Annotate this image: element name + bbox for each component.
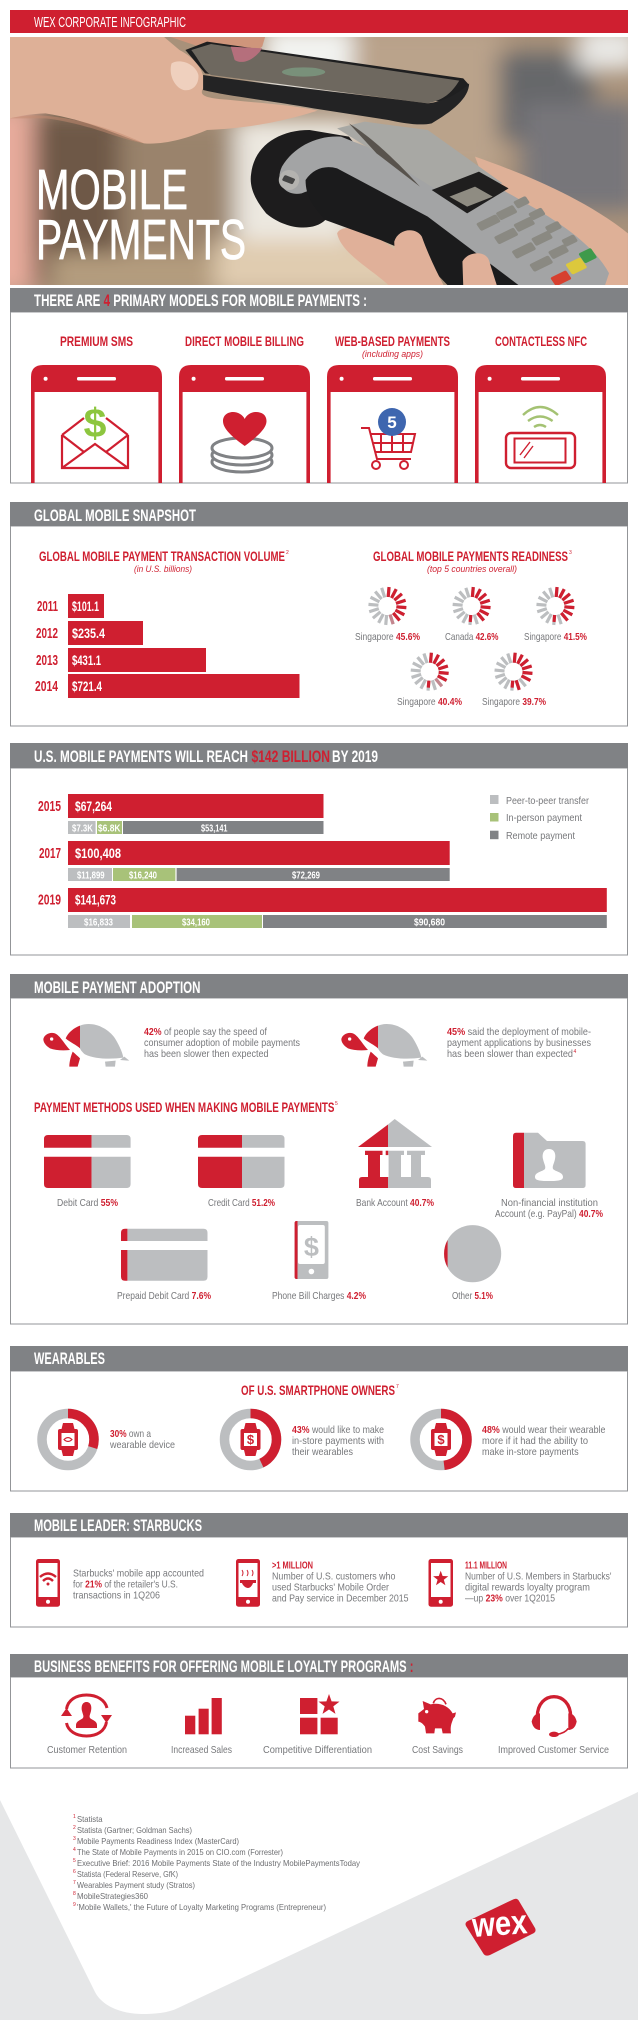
icon: phone with shopping cart: [327, 365, 458, 483]
legend: [490, 795, 589, 842]
icon: competitive differentiation: [300, 1694, 340, 1734]
footnotes: Wearables Payment study (Stratos): [77, 1881, 195, 1890]
text: 1 million customers: >1 MILLION: [272, 1560, 313, 1572]
title: mobile payments: PAYMENTS: [36, 208, 246, 272]
label: improved customer service: Improved Customer Service: [498, 1744, 609, 1756]
heading: U.S. mobile payments: BY 2019: [332, 747, 378, 766]
donut: 48%: [415, 1414, 467, 1466]
text: 11.1 million members: [465, 1560, 612, 1604]
chart title: readiness: (top 5 countries overall): [427, 564, 517, 574]
icon: cost savings piggy bank: [418, 1698, 456, 1733]
footnotes: Statista: [77, 1815, 103, 1824]
chart title: transaction volume: [39, 548, 289, 574]
footer background shape: [0, 1792, 638, 2020]
label: cost savings: Cost Savings: [412, 1744, 463, 1756]
label: web-based payments: [335, 333, 450, 359]
bar group: 2019: $90,680: [414, 916, 445, 928]
icon: phone with heart and coins: [179, 365, 310, 483]
subheading: smartphone owners: OF U.S. SMARTPHONE OWNERS: [241, 1382, 395, 1398]
bar chart: transaction volume: 2014: [35, 678, 58, 695]
footnotes: 4: [73, 1847, 76, 1853]
icon: prepaid debit card 7.6%: [121, 1229, 208, 1281]
donut: 48%: $: [437, 1432, 445, 1447]
logo: wex: wex: [470, 1903, 529, 1945]
footnotes: 'Mobile Wallets,' the Future of Loyalty Marketing Programs (Entrepreneur): [77, 1903, 326, 1912]
icon: customer retention: [61, 1695, 112, 1736]
donut: 30%: [42, 1414, 94, 1466]
text: 43% in-store: their wearables: [292, 1446, 353, 1458]
panel: primary models: [10, 288, 628, 483]
gauge: Singapore 45.6%: Singapore 45.6%: [355, 631, 421, 643]
bar group: 2015: $6.8K: [98, 822, 121, 834]
text: 48% would wear: more if it had the ability to: [482, 1435, 588, 1447]
icon: phone with star: [428, 1559, 453, 1607]
text: 21% transactions: transactions in 1Q206: [73, 1590, 160, 1602]
text: 11.1 million members: digital rewards loyalty program: [465, 1582, 590, 1594]
logo: wex: [466, 1899, 536, 1956]
donut: 43%: $: [247, 1432, 255, 1447]
gauge: Canada 42.6%: [445, 585, 499, 643]
label: increased sales: Increased Sales: [171, 1744, 232, 1756]
heading: mobile payment adoption: MOBILE PAYMENT ADOPTION: [34, 978, 200, 997]
text: 30% own: wearable device: [109, 1439, 175, 1451]
footnotes: Statista (Gartner; Goldman Sachs): [77, 1826, 192, 1835]
text: 1 million customers: used Starbucks' Mobile Order: [272, 1582, 389, 1594]
icon: other pie 5.1%: [444, 1225, 501, 1282]
bar group: 2019: $141,673: [75, 892, 116, 908]
text: 45% slower deployment: has been slower than expected: [447, 1048, 573, 1060]
hand on phone: [10, 33, 317, 144]
footnotes: Executive Brief: 2016 Mobile Payments State of the Industry MobilePaymentsToday: [77, 1859, 361, 1868]
text: 1 million customers: and Pay service in December 2015: [272, 1592, 409, 1604]
top banner: [10, 10, 628, 33]
footnotes: 6: [73, 1869, 76, 1875]
gauge: Singapore 39.7%: Singapore 39.7%: [482, 696, 547, 708]
text: 45% slower deployment: payment applications by businesses: [447, 1037, 591, 1049]
bar chart: transaction volume: $431.1: [72, 652, 101, 668]
heading: business benefits: BUSINESS BENEFITS FOR OFFERING MOBILE LOYALTY PROGRAMS :: [34, 1657, 414, 1676]
right hand under terminal: [475, 157, 628, 287]
gauge: Singapore 40.4%: [397, 651, 463, 708]
panel: mobile payment adoption: [10, 974, 628, 1324]
label: other: Other 5.1%: [452, 1290, 494, 1302]
gauge: Singapore 39.7%: [482, 651, 547, 708]
chart title: readiness: [373, 548, 572, 574]
text: 45% slower deployment: 4: [574, 1049, 576, 1055]
text: 43% in-store: 43% would like to make: [292, 1424, 384, 1436]
icon: phone with contactless terminal: [475, 365, 606, 483]
title: mobile payments: MOBILE: [36, 158, 188, 222]
bar group: 2017: $72,269: [292, 870, 320, 882]
label: non-financial account: Non-financial institution: [501, 1197, 598, 1209]
bar chart: transaction volume: 2012: [36, 625, 58, 642]
bar group: 2017: 2017: [39, 845, 61, 862]
heading: primary models: THERE ARE 4 PRIMARY MODELS FOR MOBILE PAYMENTS :: [34, 291, 367, 310]
heading: wearables: WEARABLES: [34, 1349, 105, 1368]
text: 43% in-store: [292, 1424, 384, 1458]
title: mobile payments: [38, 169, 244, 260]
label: web-based payments: WEB-BASED PAYMENTS: [335, 333, 450, 349]
bar chart: transaction volume: $101.1: [72, 598, 99, 614]
text: 45% slower deployment: 45% said the deployment of mobile-: [447, 1026, 591, 1038]
icon: phone bill 4.2%: $: [304, 1232, 319, 1262]
heading: U.S. mobile payments: $142 BILLION: [252, 747, 330, 766]
bar group: 2015: 2015: [38, 798, 61, 815]
icon: folder account 40.7%: [513, 1133, 586, 1188]
label: credit card: Credit Card 51.2%: [208, 1197, 276, 1209]
text: 43% in-store: in-store payments with: [292, 1435, 384, 1447]
label: debit card: Debit Card 55%: [57, 1197, 119, 1209]
icon: debit card 55%: [44, 1135, 131, 1188]
panel: global mobile snapshot: [10, 502, 628, 726]
heading: payment methods: 5: [335, 1101, 338, 1107]
bar group: 2017: $11,899: [77, 870, 105, 882]
bar group: 2019: $16,833: [84, 916, 113, 928]
icon: phone with coffee cup: [236, 1559, 260, 1607]
text: 11.1 million members: —up 23% over 1Q2015: [465, 1592, 555, 1604]
text: 48% would wear: [482, 1424, 606, 1458]
footnotes: 5: [73, 1858, 76, 1864]
text: 11.1 million members: 11.1 MILLION: [465, 1560, 507, 1572]
legend: Peer-to-peer transfer: [506, 795, 589, 807]
keypad: [476, 196, 578, 272]
icon: credit card 51.2%: [198, 1135, 284, 1188]
fingers in front of terminal: [394, 230, 444, 285]
bar group: 2019: 2019: [38, 892, 61, 908]
label: web-based payments: (including apps): [362, 349, 423, 359]
terminal body: [250, 130, 353, 228]
label: bank account: Bank Account 40.7%: [356, 1197, 435, 1209]
icon: bank 40.7%: [358, 1119, 432, 1188]
bar chart: transaction volume: 2011: [37, 598, 58, 615]
heading: global mobile snapshot: GLOBAL MOBILE SNAPSHOT: [34, 506, 196, 525]
icon: turtle 45%: [341, 1024, 427, 1067]
label: contactless nfc: CONTACTLESS NFC: [495, 333, 587, 349]
bar group: 2017: $100,408: [75, 845, 121, 861]
text: 21% transactions: for 21% of the retailer's U.S.: [73, 1578, 178, 1590]
chart title: transaction volume: GLOBAL MOBILE PAYMENT TRANSACTION VOLUME: [39, 548, 285, 564]
text: 42% slower adoption: has been slower then expected: [144, 1048, 269, 1060]
text: 21% transactions: Starbucks' mobile app accounted: [73, 1568, 204, 1580]
label: customer retention: Customer Retention: [47, 1744, 127, 1756]
footnotes: 7: [73, 1880, 76, 1886]
bar chart: transaction volume: $721.4: [72, 678, 102, 694]
subheading: smartphone owners: 7: [396, 1384, 399, 1390]
legend: In-person payment: [506, 812, 582, 824]
text: 45% slower deployment: [447, 1026, 591, 1060]
label: direct mobile billing: DIRECT MOBILE BILLING: [185, 333, 304, 349]
footnotes: Mobile Payments Readiness Index (MasterCard): [77, 1837, 239, 1846]
text: 48% would wear: 48% would wear their wearable: [482, 1424, 606, 1436]
text: 42% slower adoption: [144, 1026, 300, 1060]
chart title: transaction volume: 2: [286, 550, 289, 556]
panel: U.S. mobile payments forecast: [10, 743, 628, 955]
panel: mobile leader starbucks: [10, 1513, 628, 1627]
footnotes: 1: [73, 1814, 76, 1820]
bar group: 2017: $16,240: [129, 870, 157, 882]
panel: wearables: [10, 1346, 628, 1491]
icon: phone with envelope: $: [84, 400, 107, 446]
bar chart: transaction volume: [35, 594, 300, 698]
bar group: 2015: [38, 794, 324, 834]
text: 48% would wear: make in-store payments: [482, 1446, 579, 1458]
phone: [185, 42, 469, 103]
label: non-financial account: Account (e.g. PayPal) 40.7%: [495, 1208, 604, 1220]
icon: turtle 42%: [43, 1024, 129, 1067]
footnotes: 8: [73, 1891, 76, 1897]
heading: payment methods: PAYMENT METHODS USED WHEN MAKING MOBILE PAYMENTS: [34, 1099, 334, 1115]
gauge: Singapore 41.5%: Singapore 41.5%: [524, 631, 588, 643]
bar chart: transaction volume: 2013: [36, 652, 58, 669]
icon: phone with wifi: [36, 1559, 60, 1607]
terminal hand fingers behind: [337, 228, 406, 285]
footnotes: Statista (Federal Reserve, GfK): [77, 1870, 178, 1879]
text: 30% own: 30% own a: [110, 1428, 151, 1440]
text: 30% own: [109, 1428, 175, 1451]
chart title: readiness: 3: [569, 550, 572, 556]
icon: increased sales: [185, 1698, 222, 1734]
icon: phone bill 4.2%: [295, 1221, 328, 1279]
gauge: Canada 42.6%: Canada 42.6%: [445, 631, 499, 643]
text: 42% slower adoption: consumer adoption of mobile payments: [144, 1037, 300, 1049]
gauge: Singapore 40.4%: Singapore 40.4%: [397, 696, 463, 708]
text: 1 million customers: Number of U.S. customers who: [272, 1570, 396, 1582]
icon: phone with shopping cart: 5: [387, 413, 397, 432]
heading: U.S. mobile payments: U.S. MOBILE PAYMENTS WILL REACH: [34, 747, 248, 766]
footnotes: The State of Mobile Payments in 2015 on CIO.com (Forrester): [77, 1848, 283, 1857]
chart title: transaction volume: (in U.S. billions): [134, 564, 192, 574]
text: 42% slower adoption: 42% of people say the speed of: [144, 1026, 267, 1038]
label: non-financial account: [495, 1197, 604, 1220]
text: 21% transactions: [73, 1568, 204, 1602]
hero photo: hand holding phone over payment terminal: [0, 27, 638, 293]
bar group: 2019: $34,160: [182, 916, 210, 928]
label: prepaid debit card: Prepaid Debit Card 7.6%: [117, 1290, 212, 1302]
footnotes: MobileStrategies360: [77, 1892, 148, 1901]
footnotes: [73, 1814, 361, 1912]
legend: Remote payment: [506, 830, 575, 842]
bar group: 2019: [38, 888, 607, 928]
bar group: 2015: $53,141: [201, 822, 228, 834]
icon: phone with envelope: [31, 365, 162, 483]
label: competitive differentiation: Competitive Differentiation: [263, 1744, 372, 1756]
bar chart: transaction volume: $235.4: [72, 625, 105, 641]
donut: 43%: [224, 1414, 276, 1466]
footnotes: 2: [73, 1825, 76, 1831]
top banner: WEX CORPORATE INFOGRAPHIC: [34, 14, 186, 31]
label: premium sms: PREMIUM SMS: [60, 333, 133, 349]
label: phone bill charges: Phone Bill Charges 4.2%: [272, 1290, 367, 1302]
footnotes: 9: [73, 1902, 76, 1908]
gauge: Singapore 45.6%: [355, 585, 421, 643]
bar group: 2017: [39, 841, 450, 882]
heading: starbucks: MOBILE LEADER: STARBUCKS: [34, 1516, 202, 1535]
bar group: 2015: $67,264: [75, 798, 112, 814]
icon: improved service headset: [532, 1697, 577, 1737]
footnotes: 3: [73, 1836, 76, 1842]
bar group: 2015: $7.3K: [72, 822, 93, 834]
gauge: Singapore 41.5%: [524, 585, 588, 643]
text: 1 million customers: [272, 1560, 409, 1604]
panel: business benefits: [10, 1654, 628, 1768]
